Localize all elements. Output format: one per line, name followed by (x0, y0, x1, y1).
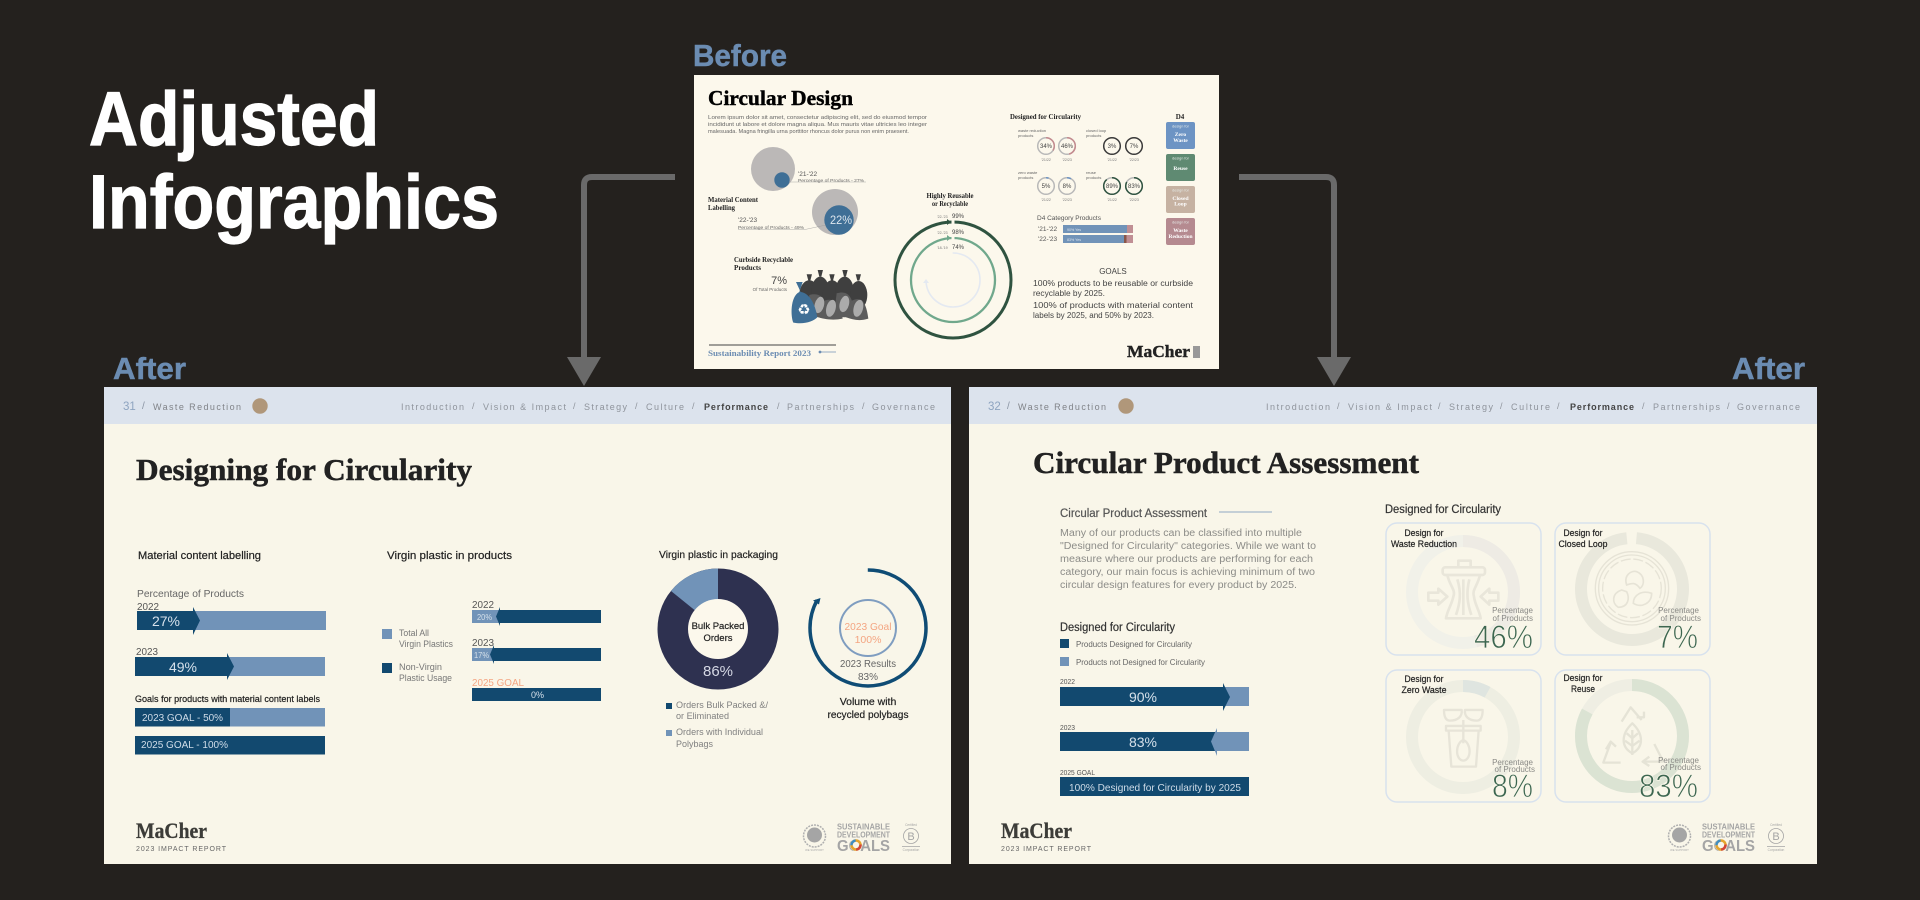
header bar right: Partnerships (1653, 402, 1720, 412)
logo: sustainable development goals: SUSTAINABLE (837, 822, 891, 832)
text block: circular product assessment (1060, 508, 1316, 591)
card: waste reduction: 46% (1474, 619, 1533, 655)
header bar left: / (573, 401, 576, 411)
logo: un global compact: WE SUPPORT (805, 848, 824, 852)
text block: circular product assessment: measure where our products are performing for each (1060, 554, 1313, 565)
goals text: labels by 2025, and 50% by 2023. (1033, 311, 1154, 320)
logo: b corporation: B (1772, 831, 1780, 843)
logo: sustainable development goals: DEVELOPMENT (1702, 830, 1755, 840)
header bar left: Vision & Impact (483, 402, 566, 412)
chart: virgin plastic in packaging donut: Orders with Individual (676, 727, 763, 738)
header bar right: Vision & Impact (1348, 402, 1432, 412)
header bar right: Governance (1737, 402, 1800, 412)
card: waste reduction (1386, 523, 1541, 655)
curbside recyclable products: 7% (771, 275, 787, 287)
goals text: GOALS (1099, 267, 1127, 276)
logo: macher: MaCher (1001, 818, 1072, 843)
chart: designed for circularity bars: 2025 GOAL (1060, 770, 1095, 777)
chart: material content labelling: 2023 (136, 647, 158, 658)
d4 category products bars: '21-'22 (1038, 226, 1057, 233)
heading: designing for circularity: Designing for Circularity (136, 452, 472, 487)
designed for circularity small donuts: 5% (1042, 184, 1051, 190)
icon: trash compress (1428, 561, 1498, 618)
chart: virgin plastic in products: 2025 GOAL (472, 677, 524, 689)
chart: designed for circularity bars: 100% Designed for Circularity by 2025 (1069, 782, 1241, 794)
chart: designed for circularity bars: 2023 (1060, 725, 1075, 732)
card: closed loop: 7% (1657, 619, 1698, 655)
chart: material content labelling: 49% (169, 659, 197, 675)
logo: b corporation: Corporation (1768, 848, 1785, 852)
header bar left: Waste Reduction (153, 402, 241, 412)
highly reusable rings chart: '22-'23 (937, 231, 948, 235)
d4 category products bars: D4 Category Products (1037, 215, 1102, 222)
card: closed loop: Design for (1564, 528, 1602, 539)
header bar left: Introduction (401, 402, 464, 412)
chart: virgin plastic in products: 2023 (472, 638, 494, 649)
chart: material content labelling: 2022 (137, 602, 159, 613)
card: waste reduction: Waste Reduction (1391, 539, 1457, 550)
designed for circularity small donuts: '21/22 (1107, 198, 1117, 202)
logo: b corporation (1767, 823, 1785, 852)
designed for circularity small donuts: products (1086, 175, 1101, 180)
highly reusable rings chart: 98% (952, 230, 965, 236)
chart: virgin plastic in products (382, 550, 601, 701)
chart: virgin plastic in packaging donut: Virgin plastic in packaging (659, 549, 778, 561)
designed for circularity small donuts: '22/23 (1062, 158, 1072, 162)
d4 category cards: Zero (1175, 132, 1186, 138)
highly reusable rings chart: 99% (952, 214, 965, 220)
heading: designed for circularity cards: Designed for Circularity (1385, 504, 1501, 516)
d4 category cards: design for (1172, 124, 1190, 128)
logo: sustainable development goals: GOALS (837, 838, 890, 855)
chart: virgin plastic in products: Plastic Usage (399, 673, 452, 683)
card: reuse (1555, 670, 1710, 804)
logo: b corporation (902, 823, 920, 852)
header bar right: Waste Reduction (1018, 402, 1106, 412)
chart: virgin plastic in products: Virgin plastic in products (387, 550, 513, 562)
card: reuse: Design for (1564, 673, 1602, 684)
logo: b corporation: B (907, 831, 915, 843)
logo: b corporation: Corporation (903, 848, 920, 852)
highly reusable rings chart: '22-'23 (937, 215, 948, 219)
header bar left (104, 387, 951, 424)
d4 category products bars: 83% Yes (1067, 238, 1081, 242)
card: zero waste (1386, 670, 1541, 804)
header bar left: Partnerships (787, 402, 854, 412)
designed for circularity small donuts: products (1086, 133, 1101, 138)
highly reusable rings chart: 74% (952, 245, 965, 251)
chart: designed for circularity bars: 83% (1129, 734, 1157, 750)
heading: before: Before (693, 38, 787, 73)
material content labelling chart: Labelling (708, 204, 735, 212)
chart: designed for circularity bars: Products not Designed for Circularity (1076, 658, 1206, 667)
card: closed loop: Percentage (1658, 606, 1700, 615)
chart: virgin plastic in packaging donut: or Eliminated (676, 711, 729, 722)
designed for circularity small donuts: '22/23 (1062, 198, 1072, 202)
d4 category cards: Reduction (1168, 234, 1193, 240)
designed for circularity small donuts: products (1018, 133, 1033, 138)
highly reusable rings chart: or Recyclable (932, 200, 968, 208)
logo: b corporation: Certified (1770, 823, 1782, 827)
title: Adjusted (89, 77, 379, 162)
footer right (1001, 818, 1785, 855)
chart: material content labelling: 27% (152, 613, 180, 629)
curbside recyclable products (734, 256, 868, 323)
goals text (1033, 267, 1194, 320)
panel: after slide right (969, 387, 1817, 864)
before intro text: incididunt ut labore et dolore magna aliqua. Mus mauris vitae ultricies leo integer (708, 122, 927, 128)
card: reuse: Percentage (1658, 756, 1700, 765)
chart: virgin plastic in products: 0% (531, 690, 544, 700)
header bar left: Governance (872, 402, 935, 412)
designed for circularity small donuts: 8% (1063, 184, 1072, 190)
header bar left: Culture (646, 402, 684, 412)
designed for circularity small donuts: products (1018, 175, 1033, 180)
d4 category cards (1166, 113, 1195, 245)
header bar right: Strategy (1449, 402, 1494, 412)
chart: virgin plastic in packaging donut: 86% (703, 663, 733, 680)
designed for circularity small donuts: zero waste (1018, 170, 1038, 175)
card: reuse: 83% (1639, 768, 1698, 804)
designed for circularity small donuts: '22/23 (1129, 158, 1139, 162)
goals text: 100% of products with material content (1033, 301, 1194, 310)
designed for circularity small donuts: closed loop (1086, 128, 1107, 133)
header bar right: Introduction (1266, 402, 1330, 412)
logo: b corporation: Certified (905, 823, 917, 827)
material content labelling chart: Material Content (708, 196, 759, 204)
card: waste reduction: Design for (1404, 528, 1444, 539)
designed for circularity small donuts: 34% (1040, 144, 1053, 150)
material content labelling chart: 22% (830, 213, 852, 227)
header bar right: / (1557, 401, 1560, 411)
before footer: Sustainability Report 2023 (708, 349, 811, 358)
material content labelling chart: Percentage of Products - 49% (738, 225, 804, 230)
chart: material content labelling: Goals for products with material content labels (135, 694, 321, 704)
text block: circular product assessment: Many of our products can be classified into multiple (1060, 528, 1302, 539)
card: zero waste: 8% (1492, 768, 1533, 804)
d4 category cards: design for (1172, 220, 1190, 224)
chart: virgin plastic in packaging donut: Polybags (676, 739, 713, 750)
designed for circularity small donuts: 83% (1128, 184, 1141, 190)
header bar left: / (635, 401, 638, 411)
icon: recycle leaf (1603, 707, 1663, 766)
card: reuse: of Products (1661, 763, 1701, 772)
chart: designed for circularity bars: Designed for Circularity (1060, 622, 1175, 634)
card: waste reduction: of Products (1493, 614, 1533, 623)
footer left (136, 818, 920, 855)
chart: designed for circularity bars (1060, 622, 1249, 796)
logo: macher: 2023 IMPACT REPORT (1001, 846, 1092, 853)
header bar left: / (692, 401, 695, 411)
goals text: recyclable by 2025. (1033, 289, 1105, 298)
heading: circular product assessment: Circular Product Assessment (1033, 445, 1420, 480)
logo: macher (1001, 818, 1092, 853)
designed for circularity small donuts: '21/22 (1041, 158, 1051, 162)
header bar left: Performance (704, 402, 768, 412)
heading: after left: After (113, 351, 186, 386)
logo: un global compact (1668, 825, 1690, 852)
chart: virgin plastic in products: Non-Virgin (399, 662, 442, 672)
designed for circularity small donuts: 3% (1108, 144, 1117, 150)
arrow: before to left after (567, 177, 675, 386)
d4 category cards: D4 (1176, 113, 1185, 121)
header bar left: / (472, 401, 475, 411)
chart: designed for circularity bars: 90% (1129, 689, 1157, 705)
chart: virgin plastic in packaging donut: Orders (703, 633, 733, 644)
before intro text: malesuada. Magna fringilla urna porttitor rhoncus dolor purus non enim praesent. (708, 129, 909, 135)
designed for circularity small donuts: '21/22 (1107, 158, 1117, 162)
chart: material content labelling: 2025 GOAL - 100% (141, 740, 228, 751)
d4 category cards: Loop (1174, 202, 1187, 208)
before footer (708, 345, 836, 358)
chart: volume with recycled polybags: 2023 Goal (844, 621, 892, 633)
card: zero waste: of Products (1495, 765, 1535, 774)
card: reuse: Reuse (1571, 684, 1595, 695)
d4 category cards: Waste (1173, 138, 1188, 144)
chart: designed for circularity bars: Products Designed for Circularity (1076, 640, 1193, 649)
designed for circularity small donuts: '22/23 (1129, 198, 1139, 202)
panel: after slide left (104, 387, 951, 864)
header bar left: Strategy (584, 402, 628, 412)
material content labelling chart (708, 147, 866, 235)
highly reusable rings chart (895, 192, 1011, 338)
d4 category products bars: 90% Yes (1067, 228, 1081, 232)
designed for circularity small donuts: waste reduction (1018, 128, 1046, 133)
arrow: before to right after (1239, 177, 1351, 386)
chart: volume with recycled polybags: 83% (858, 672, 878, 683)
d4 category cards: Reuse (1173, 166, 1188, 172)
d4 category products bars (1037, 215, 1133, 243)
logo: sustainable development goals (1702, 822, 1756, 855)
text block: circular product assessment: "Designed for Circularity" categories. While we want to (1060, 541, 1316, 552)
chart: virgin plastic in packaging donut (658, 549, 778, 750)
chart: volume with recycled polybags: Volume with (840, 696, 896, 708)
header bar right: / (1337, 401, 1340, 411)
header bar right: / (1642, 401, 1645, 411)
chart: virgin plastic in packaging donut: Bulk Packed (692, 621, 744, 632)
chart: material content labelling (135, 550, 326, 754)
d4 category cards: Closed (1172, 196, 1189, 202)
card: zero waste: Percentage (1492, 758, 1534, 767)
header bar left: / (862, 401, 865, 411)
header bar right: / (1500, 401, 1503, 411)
chart: virgin plastic in packaging donut: Orders Bulk Packed &/ (676, 700, 768, 711)
curbside recyclable products: Of Total Products (753, 287, 788, 292)
chart: volume with recycled polybags: recycled polybags (828, 709, 908, 721)
header bar right: / (1727, 401, 1730, 411)
chart: material content labelling: Material content labelling (138, 550, 261, 562)
before intro text (708, 115, 927, 135)
logo: sustainable development goals: SUSTAINABLE (1702, 822, 1756, 832)
header bar left: / (142, 401, 145, 412)
chart: volume with recycled polybags: 100% (855, 634, 881, 646)
header bar right: / (1438, 401, 1441, 411)
chart: volume with recycled polybags: 2023 Results (840, 659, 896, 670)
d4 category cards: Waste (1173, 228, 1188, 234)
header bar right: 32 (988, 401, 1001, 413)
header bar right (969, 387, 1817, 424)
logo: un global compact: WE SUPPORT (1670, 848, 1689, 852)
text block: circular product assessment: category, our main focus is achieving minimum of two (1060, 567, 1315, 578)
text block: circular product assessment: circular design features for every product by 2025. (1060, 580, 1297, 591)
icon: plant cup (1444, 710, 1483, 767)
icon: leaf loop (1595, 552, 1669, 625)
panel: before slide (694, 75, 1219, 369)
chart: material content labelling: Percentage of Products (137, 588, 244, 600)
logo: sustainable development goals: DEVELOPMENT (837, 830, 890, 840)
chart: virgin plastic in products: 17% (474, 650, 489, 660)
before heading: Circular Design (708, 86, 853, 110)
designed for circularity small donuts: Designed for Circularity (1010, 113, 1081, 121)
d4 category cards: design for (1172, 156, 1190, 160)
designed for circularity small donuts: 7% (1130, 144, 1139, 150)
title: Infographics (89, 160, 499, 245)
title (89, 77, 499, 245)
material content labelling chart: '21-'22 (798, 171, 817, 178)
chart: virgin plastic in products: Virgin Plastics (399, 639, 453, 649)
card: closed loop: of Products (1661, 614, 1701, 623)
chart: designed for circularity bars: 2022 (1060, 679, 1075, 686)
highly reusable rings chart: '18-'19 (937, 246, 948, 250)
card: zero waste: Zero Waste (1402, 685, 1446, 696)
chart: virgin plastic in products: 20% (477, 612, 492, 622)
header bar right: / (1007, 401, 1010, 412)
card: closed loop (1555, 523, 1710, 655)
chart: volume with recycled polybags (810, 570, 926, 721)
header bar right: Performance (1570, 402, 1634, 412)
material content labelling chart: Percentage of Products - 27% (798, 178, 864, 183)
designed for circularity small donuts: 89% (1106, 184, 1119, 190)
logo: un global compact (804, 825, 826, 852)
designed for circularity small donuts: 46% (1061, 144, 1074, 150)
designed for circularity small donuts: '21/22 (1041, 198, 1051, 202)
logo: sustainable development goals: GOALS (1702, 838, 1755, 855)
icon: garbage bags: ♻ (797, 301, 811, 318)
designed for circularity small donuts (1010, 113, 1142, 202)
text block: circular product assessment: Circular Product Assessment (1060, 508, 1208, 520)
material content labelling chart: '22-'23 (738, 217, 757, 224)
d4 category cards: design for (1172, 188, 1190, 192)
header bar left: 31 (123, 401, 136, 413)
logo: sustainable development goals (837, 822, 891, 855)
before logo: MaCher (1127, 342, 1190, 361)
chart: virgin plastic in products: 2022 (472, 600, 494, 611)
chart: material content labelling: 2023 GOAL - 50% (142, 713, 223, 724)
d4 category products bars: '22-'23 (1038, 236, 1057, 243)
card: waste reduction: Percentage (1492, 606, 1534, 615)
goals text: 100% products to be reusable or curbside (1033, 279, 1194, 288)
header bar right: Culture (1511, 402, 1550, 412)
card: zero waste: Design for (1404, 674, 1444, 685)
designed for circularity small donuts: reuse (1086, 170, 1097, 175)
highly reusable rings chart: Highly Reusable (926, 192, 974, 200)
heading: after right: After (1732, 351, 1805, 386)
curbside recyclable products: Curbside Recyclable (734, 256, 793, 264)
logo: macher (136, 818, 227, 853)
card: closed loop: Closed Loop (1558, 539, 1608, 550)
logo: macher: 2023 IMPACT REPORT (136, 846, 227, 853)
logo: macher: MaCher (136, 818, 207, 843)
before intro text: Lorem ipsum dolor sit amet, consectetur adipiscing elit, sed do eiusmod tempor (708, 115, 927, 121)
curbside recyclable products: Products (734, 264, 761, 272)
chart: virgin plastic in products: Total All (399, 628, 429, 638)
header bar left: / (777, 401, 780, 411)
